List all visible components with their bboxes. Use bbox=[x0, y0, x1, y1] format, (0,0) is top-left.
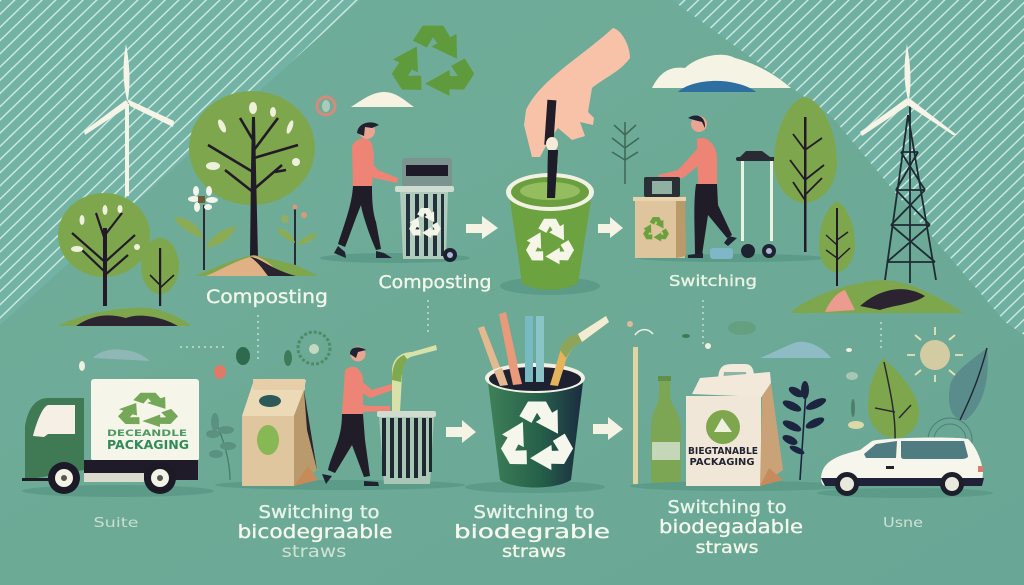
striped corner top left bbox=[0, 0, 360, 325]
tall tree right bbox=[774, 97, 837, 252]
striped corner top right bbox=[672, 0, 1024, 335]
label switching 2: biodegrable bbox=[454, 521, 610, 543]
person composting bbox=[320, 122, 470, 263]
small tree behind bbox=[141, 238, 179, 306]
delivery truck: PACKAGING bbox=[107, 438, 189, 452]
label switching 1: bicodegraable bbox=[238, 521, 392, 543]
label composting center: Composting bbox=[378, 272, 492, 293]
paper bag: BIEGTANABLE bbox=[688, 446, 758, 457]
small cloud lower right bbox=[760, 342, 831, 358]
label switching 2 bbox=[454, 502, 610, 562]
cardboard box bbox=[633, 177, 686, 258]
label switching 2: straws bbox=[502, 542, 566, 562]
dark plant bbox=[781, 381, 828, 480]
fern bbox=[612, 122, 639, 184]
dark recycling cup bbox=[465, 340, 605, 493]
recycle symbol top bbox=[385, 26, 479, 100]
small cloud top left bbox=[351, 92, 414, 107]
small tree right bbox=[819, 201, 855, 286]
label switching: Switching bbox=[669, 272, 757, 290]
label suite: Suite bbox=[94, 516, 138, 531]
person with straw bbox=[322, 346, 393, 486]
floating small marks bbox=[627, 321, 864, 429]
dotted connectors bbox=[180, 300, 881, 360]
delivery truck bbox=[22, 379, 214, 497]
big tree bbox=[189, 91, 315, 258]
grey leaf bbox=[928, 348, 988, 462]
label switching 1 bbox=[238, 502, 392, 562]
wind turbine lattice right bbox=[860, 44, 957, 283]
label switching 3 bbox=[659, 497, 803, 558]
arrow 4 bbox=[593, 417, 623, 440]
label usne: Usne bbox=[883, 516, 923, 531]
arrow 2 bbox=[598, 217, 623, 238]
sapling bbox=[276, 204, 318, 265]
label switching 2: Switching to bbox=[474, 502, 594, 523]
label switching 3: biodegadable bbox=[659, 516, 803, 538]
flower bbox=[174, 186, 236, 270]
arrow 3 bbox=[446, 420, 476, 443]
person with box bbox=[637, 115, 827, 262]
ground right bbox=[790, 280, 964, 313]
bin with straw bbox=[377, 345, 437, 484]
label switching 3: Switching to bbox=[668, 497, 786, 518]
sun bbox=[907, 327, 963, 382]
straws in cup bbox=[478, 312, 609, 396]
carton bbox=[215, 379, 465, 490]
ground left bbox=[58, 308, 191, 326]
paper bag: PACKAGING bbox=[690, 457, 755, 468]
paper bag bbox=[630, 364, 850, 491]
wind turbine left bbox=[84, 44, 174, 196]
small tree left bbox=[58, 193, 150, 306]
upright straw bbox=[633, 347, 638, 484]
arrow 1 bbox=[466, 216, 498, 239]
hand holding straw bbox=[524, 28, 630, 200]
label switching 1: straws bbox=[282, 542, 347, 562]
cart bbox=[710, 151, 776, 259]
small cloud lower left bbox=[93, 349, 150, 361]
green bottle bbox=[651, 376, 681, 484]
label switching 3: straws bbox=[696, 538, 759, 558]
floating small icons bbox=[79, 332, 330, 379]
label switching 1: Switching to bbox=[258, 502, 380, 523]
white car bbox=[817, 438, 993, 498]
green cup bbox=[500, 150, 600, 295]
green leaf bbox=[868, 358, 919, 440]
label composting left: Composting bbox=[206, 286, 328, 308]
cloud top right bbox=[652, 55, 791, 92]
trash bin recycling bbox=[395, 158, 457, 262]
small ring icon bbox=[317, 97, 335, 115]
delivery truck: DECEANDLE bbox=[107, 429, 187, 439]
mound bbox=[195, 255, 318, 276]
plant beside carton bbox=[206, 413, 236, 480]
